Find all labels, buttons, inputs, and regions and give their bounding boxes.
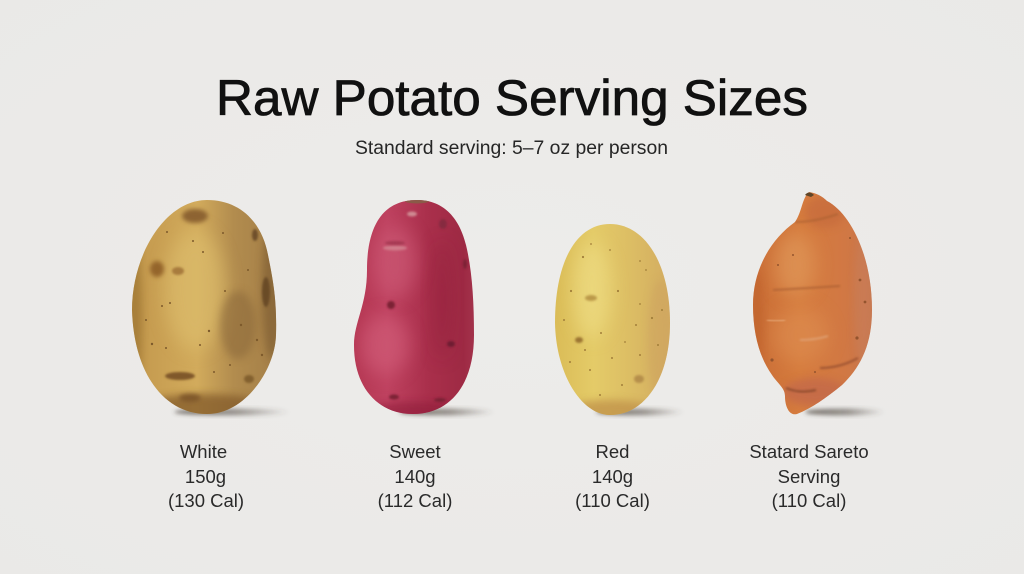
label: sweet: (112 Cal): [378, 490, 452, 511]
label: sweet: Sweet: [389, 441, 441, 462]
label: standard serving: Serving: [778, 466, 840, 487]
label: red: (110 Cal): [575, 490, 650, 511]
label: red: Red: [596, 441, 629, 462]
title: Raw Potato Serving Sizes: [216, 70, 808, 126]
label: sweet: 140g: [394, 466, 436, 487]
potato: red-skinned: [354, 200, 490, 418]
label: white potato: (130 Cal): [168, 490, 244, 511]
stem tip: [805, 192, 814, 197]
subtitle: Standard serving: 5–7 oz per person: [355, 138, 668, 159]
infographic canvas: [132, 78, 880, 511]
potato: white: [132, 200, 283, 418]
label: white potato: White: [180, 441, 227, 462]
potato: yellow: [555, 224, 679, 418]
potato: sweet orange: [748, 188, 885, 420]
label: standard serving: Statard Sareto: [749, 441, 869, 462]
label: standard serving: (110 Cal): [772, 490, 846, 511]
label: red: 140g: [592, 466, 633, 487]
label: white potato: 150g: [185, 466, 226, 487]
